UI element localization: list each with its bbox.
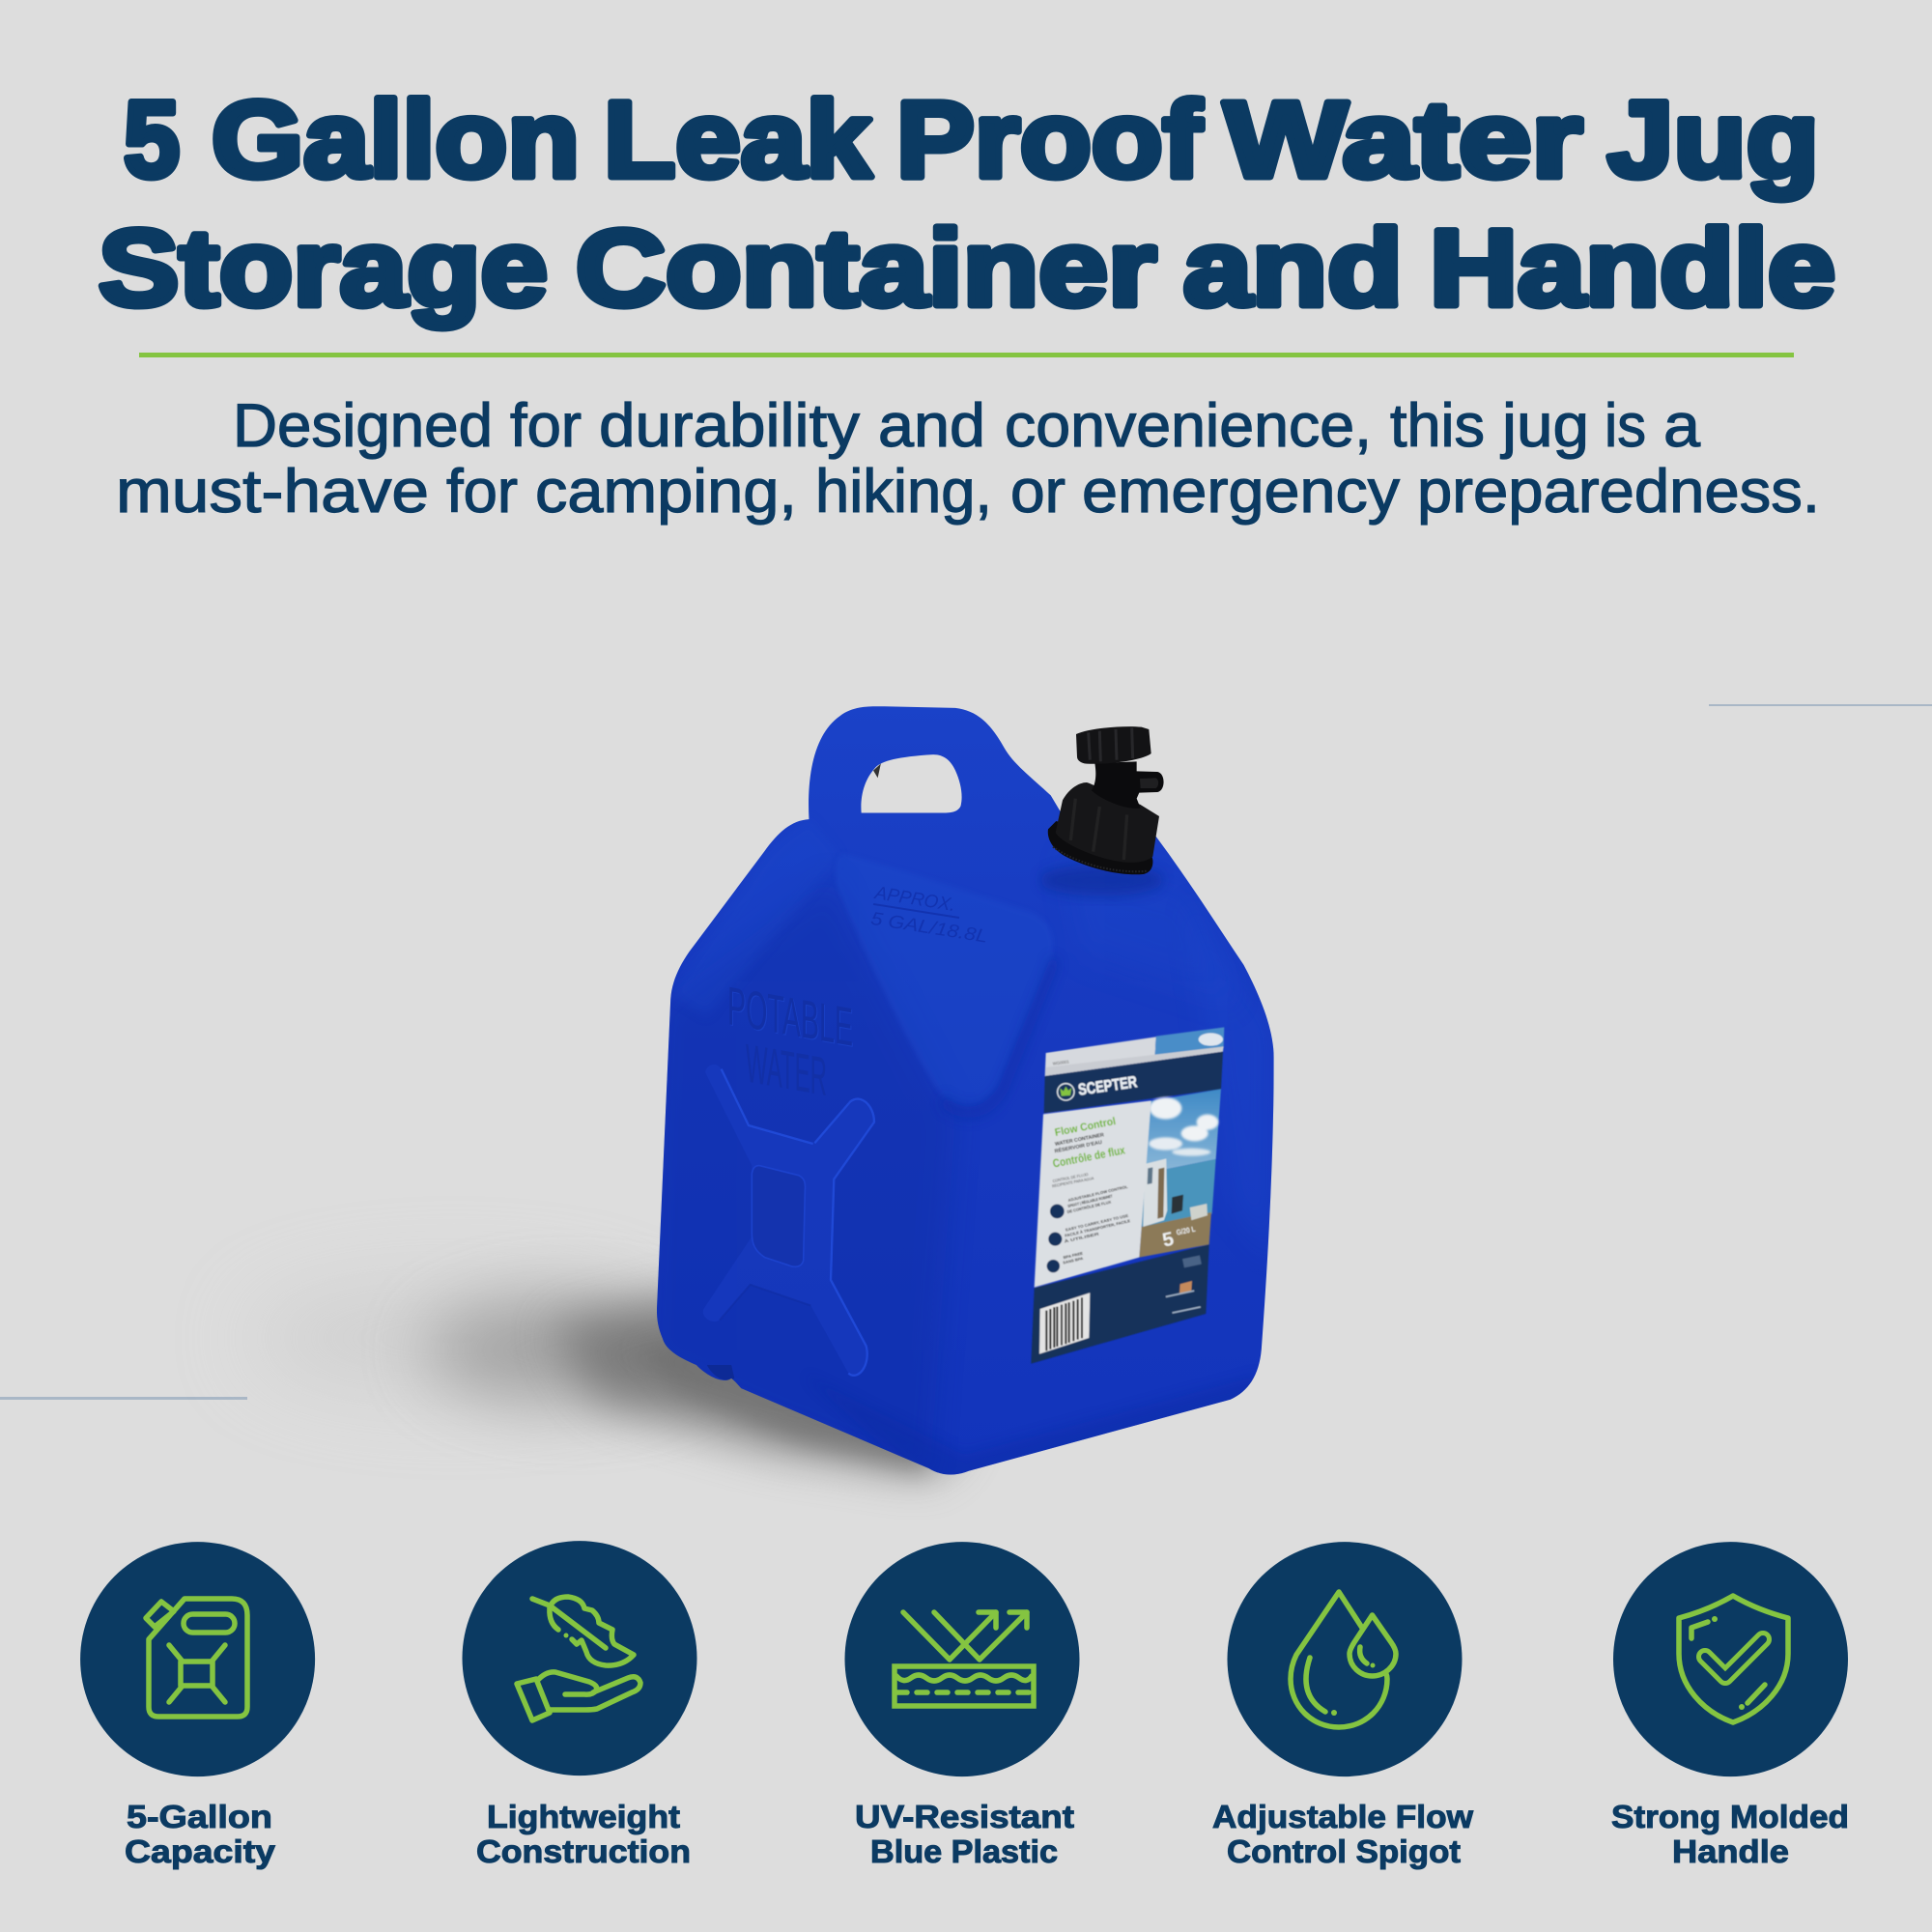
subtitle: [116, 392, 1820, 526]
product label: [1031, 1027, 1224, 1364]
caption: [1212, 1799, 1473, 1869]
title: Container: [576, 208, 1156, 328]
product label: ADJUSTABLE FLOW CONTROL: [1067, 1184, 1128, 1203]
jug body: [645, 692, 1288, 1487]
product label: G/20 L: [1176, 1225, 1196, 1237]
icon: UV rays reflecting off surface: [895, 1612, 1034, 1706]
product label: SPIGOT | RÉGLABLE ROBINET: [1067, 1193, 1113, 1208]
subtitle: hiking,: [815, 458, 992, 526]
subtitle: and: [878, 392, 985, 460]
feature: UV-resistant blue plastic: [844, 1542, 1080, 1869]
title: [99, 79, 1835, 328]
caption: Construction: [476, 1833, 691, 1869]
product label: WG0001: [1052, 1059, 1070, 1066]
embossed text: POTABLE: [728, 977, 854, 1059]
subtitle: is: [1605, 392, 1646, 460]
title: 5: [124, 79, 180, 200]
feature: adjustable flow control spigot: [1212, 1542, 1473, 1869]
product photo: blue water jug: [645, 692, 1288, 1487]
product label: RÉSERVOIR D'EAU: [1054, 1138, 1103, 1154]
title: Jug: [1607, 79, 1819, 200]
title: Leak: [604, 79, 872, 200]
caption: [855, 1799, 1074, 1869]
caption: Capacity: [125, 1833, 276, 1869]
product label: DE CONTRÔLE DE FLUX: [1066, 1200, 1112, 1214]
product label: WATER CONTAINER: [1055, 1132, 1105, 1148]
icon: jerrycan: [146, 1599, 247, 1717]
title: Gallon: [212, 79, 580, 200]
product label: FACILE À TRANSPORTER, FACILE: [1065, 1218, 1131, 1238]
title: Storage: [99, 208, 548, 328]
subtitle: jug: [1500, 392, 1589, 460]
subtitle: preparedness.: [1417, 458, 1820, 526]
caption: Lightweight: [487, 1799, 680, 1834]
badge circle: [1227, 1542, 1463, 1776]
caption: Blue Plastic: [870, 1833, 1058, 1869]
spout and cap: [1048, 726, 1164, 874]
badge circle: [844, 1542, 1080, 1776]
subtitle: must-have: [116, 458, 429, 526]
accent line: bottom left: [0, 1397, 247, 1400]
caption: UV-Resistant: [855, 1799, 1074, 1834]
caption: Strong Molded: [1611, 1799, 1849, 1834]
product label: RECIPIENTE PARA AGUA: [1052, 1176, 1094, 1188]
badge circle: [80, 1542, 315, 1776]
subtitle: convenience,: [1005, 392, 1372, 460]
subtitle: or: [1010, 458, 1065, 526]
product label: CONTROL DE FLUJO: [1052, 1172, 1089, 1183]
caption: 5-Gallon: [127, 1799, 272, 1834]
jug shadow: [251, 1285, 966, 1473]
title underline: [139, 353, 1794, 357]
embossed X brace: [703, 1065, 874, 1376]
product label: Flow Control: [1054, 1116, 1117, 1139]
product label: Contrôle de flux: [1052, 1143, 1126, 1171]
icon: feather over hand: [517, 1597, 640, 1720]
caption: [1611, 1799, 1849, 1869]
embossed text: POTABLE: [727, 975, 853, 1058]
title: Water: [1224, 79, 1582, 200]
subtitle: Designed: [233, 392, 493, 460]
caption: Adjustable Flow: [1212, 1799, 1473, 1834]
product label: SCEPTER: [1077, 1072, 1138, 1099]
subtitle: this: [1390, 392, 1485, 460]
product label: À UTILISER: [1064, 1231, 1099, 1244]
badge circle: [462, 1541, 697, 1776]
icon: water drops: [1291, 1592, 1396, 1727]
subtitle: a: [1663, 392, 1701, 460]
subtitle: durability: [599, 392, 861, 460]
accent line: top right: [1709, 704, 1932, 706]
embossed capacity text: APPROX.: [872, 883, 956, 916]
product label: SANS BPA: [1063, 1256, 1084, 1265]
embossed text: [727, 975, 854, 1112]
embossed text: WATER: [746, 1033, 827, 1107]
feature: lightweight construction: [462, 1541, 697, 1869]
embossed capacity text: [868, 883, 993, 948]
subtitle: emergency: [1082, 458, 1401, 526]
title: and: [1183, 208, 1403, 328]
feature: 5-gallon capacity: [80, 1542, 315, 1869]
subtitle: for: [510, 392, 582, 460]
product label: BPA FREE: [1063, 1251, 1084, 1260]
title: Proof: [896, 79, 1203, 200]
caption: Handle: [1672, 1833, 1789, 1869]
icon: shield with check: [1679, 1596, 1788, 1722]
embossed capacity text: 5 GAL/18.8L: [869, 909, 989, 948]
caption: [476, 1799, 691, 1869]
feature: strong molded handle: [1611, 1542, 1849, 1869]
badge circle: [1613, 1542, 1848, 1776]
product label: 5: [1160, 1229, 1176, 1252]
caption: [125, 1799, 276, 1869]
caption: Control Spigot: [1227, 1833, 1461, 1869]
product label: EASY TO CARRY, EASY TO USE: [1065, 1213, 1129, 1233]
subtitle: camping,: [535, 458, 797, 526]
subtitle: for: [446, 458, 518, 526]
title: Handle: [1430, 208, 1835, 328]
